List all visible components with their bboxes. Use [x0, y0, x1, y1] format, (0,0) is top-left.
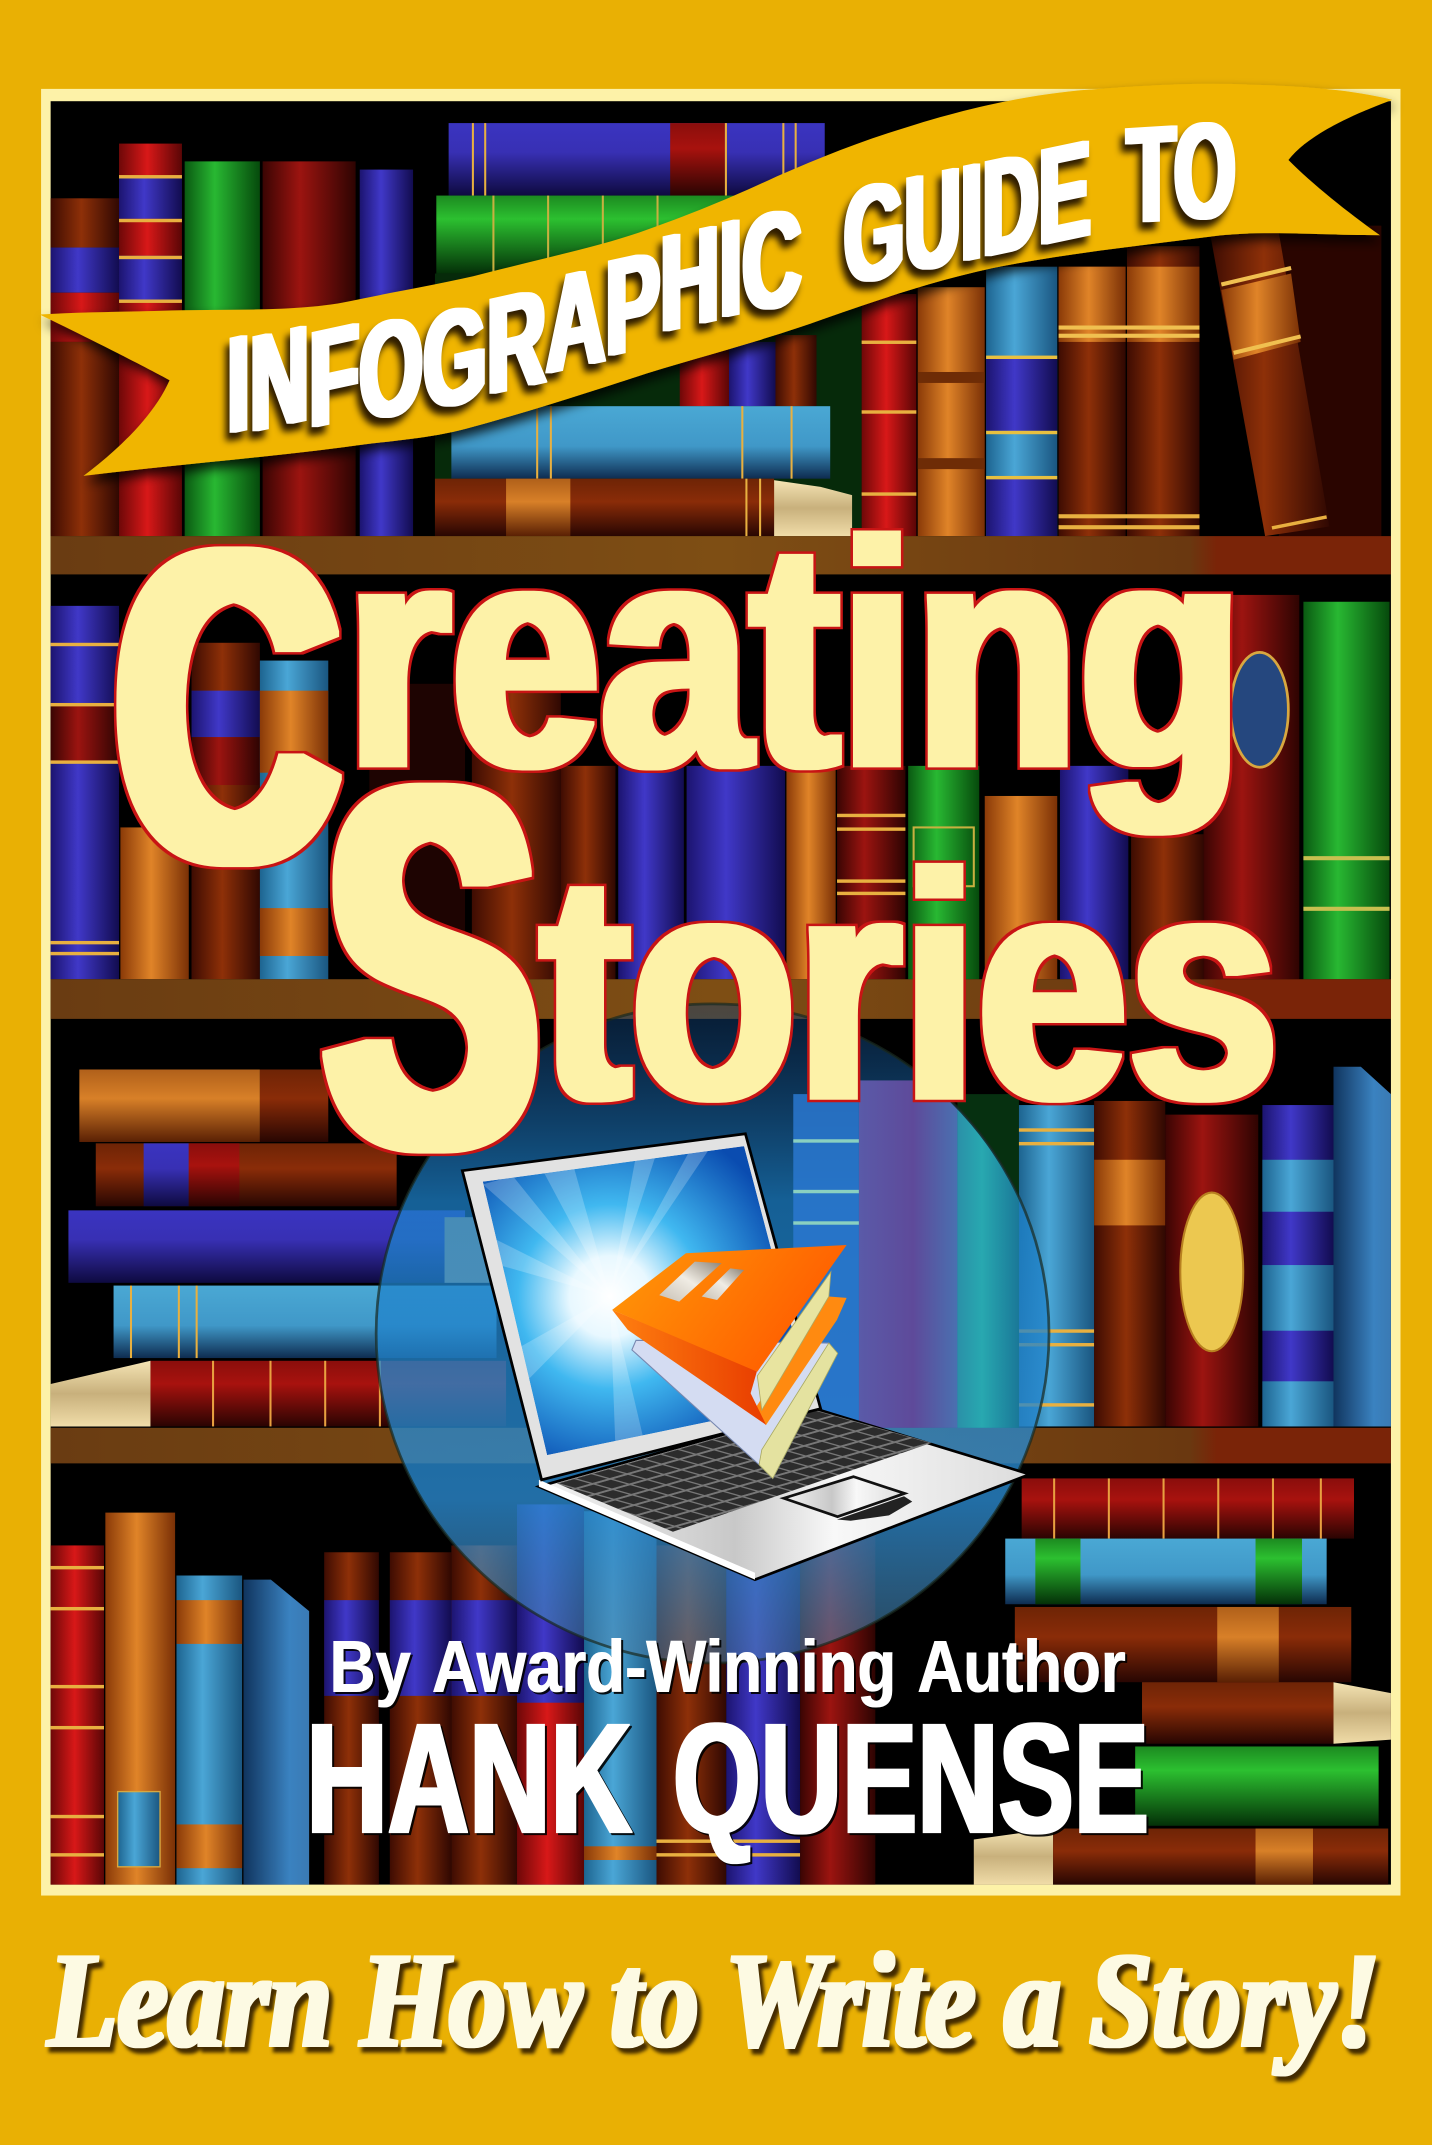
pages behind orb: [445, 1217, 492, 1283]
orange spine center: [786, 766, 836, 979]
horizontal brown book with blue and red bands: [96, 1143, 397, 1206]
touchpad: [784, 1477, 912, 1521]
blue spine: [726, 1504, 800, 1885]
horizontal blue book: [449, 123, 825, 196]
laptop with books icon: [462, 1134, 1030, 1580]
banner title text: [227, 93, 1236, 484]
stacked books: [612, 1245, 847, 1478]
main title: Creating: [116, 457, 1243, 955]
lower shelf books: [51, 1067, 1391, 1426]
top shelf books: [51, 123, 1381, 536]
lower book pages: [759, 1343, 838, 1478]
shelf board 3: [51, 1428, 1391, 1463]
orange spine right: [918, 287, 985, 536]
brown spine with orange band: [1094, 1101, 1165, 1426]
light blue and orange spine: [260, 661, 328, 979]
top book pages: [757, 1272, 831, 1410]
horizontal red book: [1022, 1478, 1354, 1539]
keyboard: [557, 1410, 931, 1532]
big letter S: S: [326, 678, 538, 1256]
red spine right: [862, 294, 916, 536]
brown and blue spines: [324, 1545, 517, 1885]
green spine center: [908, 766, 979, 979]
horizontal dark red book with pages: [1142, 1682, 1391, 1744]
byline: By Award-Winning Author: [330, 1625, 1126, 1708]
letters tories: tories: [540, 807, 1279, 1167]
cream frame: [41, 89, 1401, 1896]
green spine: [185, 161, 260, 536]
light blue and blue spine: [986, 267, 1057, 536]
faded blue spine: [793, 1094, 859, 1428]
silver label two: [702, 1268, 744, 1300]
horizontal blue book: [68, 1210, 465, 1283]
red book with oval: [1204, 595, 1299, 979]
banner title text: INFOGRAPHIC: [227, 177, 801, 484]
blue and light blue spine: [1262, 1105, 1333, 1426]
faded teal spine: [957, 1094, 1019, 1428]
banner title text: GUIDE: [844, 111, 1091, 315]
lower lavender book: [632, 1340, 837, 1478]
two blue spines: [618, 766, 785, 979]
horizontal red book with pages: [51, 1361, 506, 1426]
glowing blue orb: [376, 1004, 1049, 1663]
dark gap behind horizontal stack: [435, 274, 862, 536]
red and blue spine: [119, 144, 182, 536]
bookshelf artwork: [51, 101, 1391, 1885]
orange spine: [612, 1310, 766, 1425]
steel blue book side: [243, 1580, 309, 1885]
dark red spine: [657, 1545, 726, 1885]
shelf board 2: [51, 979, 1391, 1019]
letters reating: reating: [346, 475, 1243, 836]
steel blue book side: [1333, 1067, 1391, 1426]
red spine: [51, 1545, 104, 1885]
two brown spines: [1059, 246, 1199, 536]
horizontal brown book with pages: [974, 1829, 1388, 1885]
banner title text: TO: [1127, 93, 1236, 252]
laptop lid: [462, 1134, 821, 1480]
light blue and orange spine: [176, 1576, 242, 1885]
horizontal light blue book: [114, 1286, 496, 1358]
middle shelf books: [51, 595, 1390, 979]
shelf board 1: [51, 536, 1391, 574]
small books behind banner: [680, 335, 817, 406]
big letter C: C: [116, 457, 338, 955]
red spine center: [837, 766, 905, 979]
horizontal orange book: [79, 1069, 328, 1142]
leaning brown book: [1210, 232, 1329, 536]
horizontal light blue book with green bands: [1005, 1539, 1327, 1604]
horizontal light blue book: [451, 406, 830, 479]
middle orange sliver: [755, 1297, 847, 1425]
orange spine with inset: [105, 1513, 175, 1885]
horizontal brown book with pages: [435, 479, 852, 536]
silver label one: [659, 1262, 722, 1302]
bottom shelf books: [51, 1478, 1391, 1885]
dark green strip beside orb: [957, 1094, 1019, 1426]
light rays: [483, 1146, 711, 1450]
horizontal green book: [1135, 1746, 1379, 1826]
dark red spine: [263, 161, 356, 536]
very dark book: [1279, 226, 1381, 536]
faded books seen through orb: [793, 1080, 1019, 1428]
dark spines behind title: [369, 684, 615, 979]
blue and red spine: [517, 1504, 584, 1885]
laptop base: [539, 1409, 1030, 1580]
light blue spine right: [1019, 1105, 1094, 1426]
dark brown spine with blue band: [192, 643, 260, 979]
horizontal brown book: [1015, 1607, 1351, 1682]
green spine far right: [1303, 602, 1390, 979]
horizontal green book: [436, 196, 739, 274]
blue spine: [360, 170, 413, 536]
faded purple book: [859, 1080, 957, 1428]
far left blue and red spine: [51, 606, 119, 979]
laptop screen with rays: [483, 1146, 811, 1455]
left stacked spine: [51, 198, 119, 536]
orange spine: [120, 827, 189, 979]
blue spine right: [1060, 766, 1128, 979]
orange spine right: [985, 796, 1057, 979]
main title: Stories: [326, 678, 1279, 1256]
orange cover: [612, 1245, 847, 1372]
light blue spine: [584, 1511, 657, 1885]
red spine: [800, 1504, 875, 1885]
brown spine right: [1131, 834, 1204, 979]
dark red book with gold oval: [1165, 1115, 1258, 1426]
gold ribbon banner: [40, 84, 1392, 484]
